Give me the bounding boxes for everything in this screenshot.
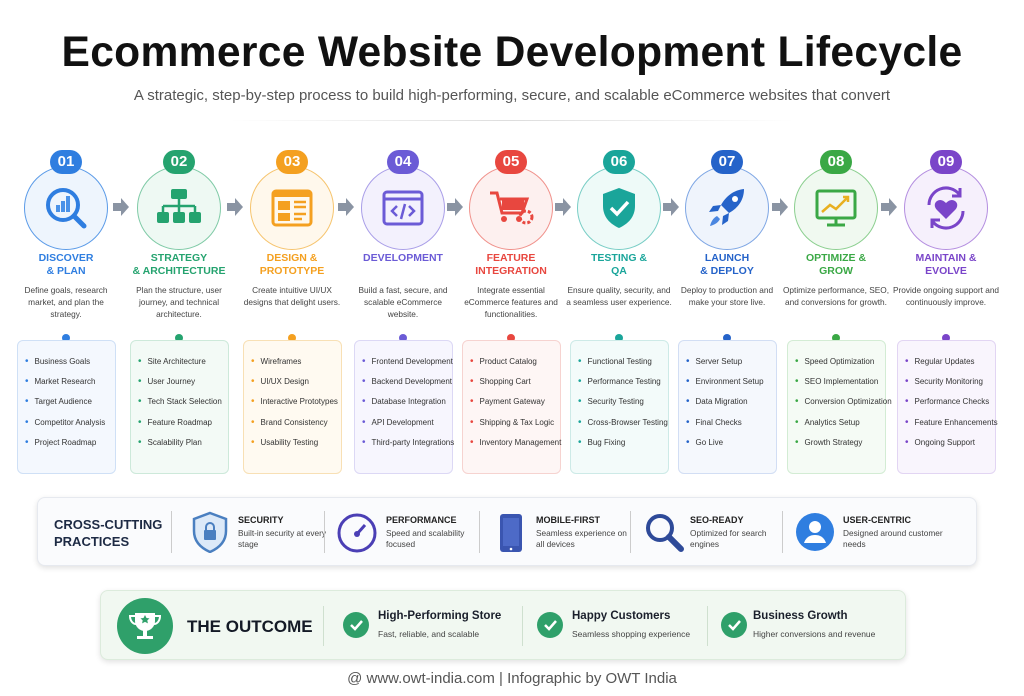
step 04: Frontend Development [372, 357, 453, 366]
icon: trophy [117, 598, 173, 654]
step 09: Provide ongoing support and continuously improve. [893, 285, 999, 307]
outcome: happy customers: Seamless shopping experience [572, 629, 690, 639]
heading: the outcome: THE OUTCOME [187, 617, 313, 636]
practice: security: SECURITY [238, 515, 284, 525]
step 06: Cross-Browser Testing [588, 418, 668, 427]
step 09: Ongoing Support [915, 438, 975, 447]
step 05: INTEGRATION [475, 264, 547, 276]
practice: mobile-first: Seamless experience on all devices [536, 528, 627, 549]
practice: performance [338, 514, 464, 552]
step 02: Tech Stack Selection [148, 397, 222, 406]
step 09 [893, 150, 999, 474]
step 09: Feature Enhancements [915, 418, 998, 427]
step 05: Shipping & Tax Logic [480, 418, 554, 427]
step 02: & ARCHITECTURE [133, 264, 225, 276]
outcome: business growth: Business Growth [753, 610, 848, 622]
step 01: Define goals, research market, and plan the strategy. [24, 285, 108, 319]
step 08: Speed Optimization [805, 357, 874, 366]
step 02: Feature Roadmap [148, 418, 212, 427]
step 07: Environment Setup [696, 377, 764, 386]
step 03: PROTOTYPE [260, 264, 324, 276]
step 05: FEATURE [487, 252, 535, 264]
step 04: Backend Development [372, 377, 452, 386]
step 07 [678, 150, 777, 474]
step 07: Data Migration [696, 397, 748, 406]
step 03 [243, 150, 342, 474]
step 06: Security Testing [588, 397, 644, 406]
step 02: STRATEGY [151, 252, 207, 264]
step 05: Inventory Management [480, 438, 561, 447]
step 02 [130, 150, 229, 474]
step 03: Usability Testing [261, 438, 318, 447]
step 01: Target Audience [35, 397, 92, 406]
step 05: Payment Gateway [480, 397, 545, 406]
title: Ecommerce Website Development Lifecycle [61, 28, 962, 76]
step 07: Deploy to production and make your store live. [681, 285, 773, 307]
step 04: Third-party Integrations [372, 438, 454, 447]
practice: security [192, 512, 326, 553]
practice: user-centric: USER-CENTRIC [843, 515, 911, 525]
subtitle: A strategic, step-by-step process to build high-performing, secure, and scalable eCommerce websites that convert [134, 87, 890, 104]
step 08: OPTIMIZE & [806, 252, 866, 264]
step 06: Functional Testing [588, 357, 652, 366]
step 03: 03 [284, 153, 300, 170]
step 01: Business Goals [35, 357, 90, 366]
step 07: & DEPLOY [700, 264, 754, 276]
outcome: happy customers [537, 610, 690, 639]
practice: seo-ready: SEO-READY [690, 515, 744, 525]
step 08: Conversion Optimization [805, 397, 892, 406]
step 03: Brand Consistency [261, 418, 328, 427]
step 07: LAUNCH [705, 252, 749, 264]
step 05 [462, 150, 562, 474]
practice: seo-ready: Optimized for search engines [690, 528, 767, 549]
step 01: DISCOVER [39, 252, 93, 264]
step 07: Go Live [696, 438, 723, 447]
step 03: Wireframes [261, 357, 301, 366]
step 03: Interactive Prototypes [261, 397, 338, 406]
practice: security: Built-in security at every stage [238, 528, 326, 549]
step 05: Shopping Cart [480, 377, 531, 386]
step 05: 05 [503, 153, 519, 170]
step 06: Bug Fixing [588, 438, 625, 447]
outcome: high-performing store: High-Performing Store [378, 610, 501, 622]
panel: the outcome [100, 590, 906, 660]
practice: seo-ready [646, 514, 767, 552]
step 02: 02 [171, 153, 187, 170]
step 01: Market Research [35, 377, 95, 386]
step 03: UI/UX Design [261, 377, 309, 386]
step 02: Scalability Plan [148, 438, 202, 447]
step 06: Performance Testing [588, 377, 661, 386]
step 01: Project Roadmap [35, 438, 96, 447]
step 09: MAINTAIN & [915, 252, 977, 264]
step 07: Final Checks [696, 418, 742, 427]
step 09: Regular Updates [915, 357, 975, 366]
practice: user-centric [796, 513, 943, 551]
heading: cross-cutting: CROSS-CUTTING [54, 517, 162, 532]
practice: user-centric: Designed around customer needs [843, 528, 943, 549]
step 06: 06 [611, 153, 627, 170]
step 08: GROW [819, 264, 853, 276]
step 05: Product Catalog [480, 357, 537, 366]
step 02: Plan the structure, user journey, and technical architecture. [136, 285, 222, 319]
outcome: business growth: Higher conversions and revenue [753, 629, 875, 639]
step 08: Growth Strategy [805, 438, 862, 447]
outcome: high-performing store [343, 610, 501, 639]
step 09: EVOLVE [925, 264, 967, 276]
step 07: Server Setup [696, 357, 742, 366]
step 08: Optimize performance, SEO, and conversions for growth. [783, 285, 889, 307]
outcome: happy customers: Happy Customers [572, 610, 670, 622]
step 09: 09 [938, 153, 954, 170]
step 04: 04 [395, 153, 411, 170]
step 04: API Development [372, 418, 434, 427]
step 03: DESIGN & [267, 252, 317, 264]
practice: mobile-first [500, 514, 627, 552]
step 04: Build a fast, secure, and scalable eCommerce website. [358, 285, 448, 319]
step 08: Analytics Setup [805, 418, 860, 427]
step 06: QA [611, 264, 627, 276]
outcome: business growth [721, 610, 875, 639]
step 09: Performance Checks [915, 397, 989, 406]
heading: cross-cutting [54, 517, 162, 549]
heading: cross-cutting: PRACTICES [54, 534, 129, 549]
step 06: TESTING & [591, 252, 647, 264]
step 08 [783, 150, 892, 474]
step 01: 01 [58, 153, 74, 170]
step 09: Security Monitoring [915, 377, 983, 386]
step 04 [354, 150, 454, 474]
step 02: Site Architecture [148, 357, 206, 366]
footer: @ www.owt-india.com | Infographic by OWT India [347, 670, 677, 687]
step 01: Competitor Analysis [35, 418, 105, 427]
practice: performance: PERFORMANCE [386, 515, 457, 525]
practice: performance: Speed and scalability focused [386, 528, 464, 549]
panel: cross-cutting practices [37, 497, 977, 566]
step 03: Create intuitive UI/UX designs that delight users. [244, 285, 340, 307]
step 08: SEO Implementation [805, 377, 878, 386]
step 02: User Journey [148, 377, 195, 386]
step 08: 08 [828, 153, 844, 170]
step 05: Integrate essential eCommerce features and functionalities. [464, 285, 558, 319]
step 01: & PLAN [46, 264, 86, 276]
outcome: high-performing store: Fast, reliable, and scalable [378, 629, 479, 639]
step 06: Ensure quality, security, and a seamless user experience. [566, 285, 672, 307]
step 04: DEVELOPMENT [363, 252, 443, 264]
step 07: 07 [719, 153, 735, 170]
step 04: Database Integration [372, 397, 446, 406]
step 01 [17, 150, 116, 474]
practice: mobile-first: MOBILE-FIRST [536, 515, 600, 525]
step 06 [566, 150, 672, 474]
